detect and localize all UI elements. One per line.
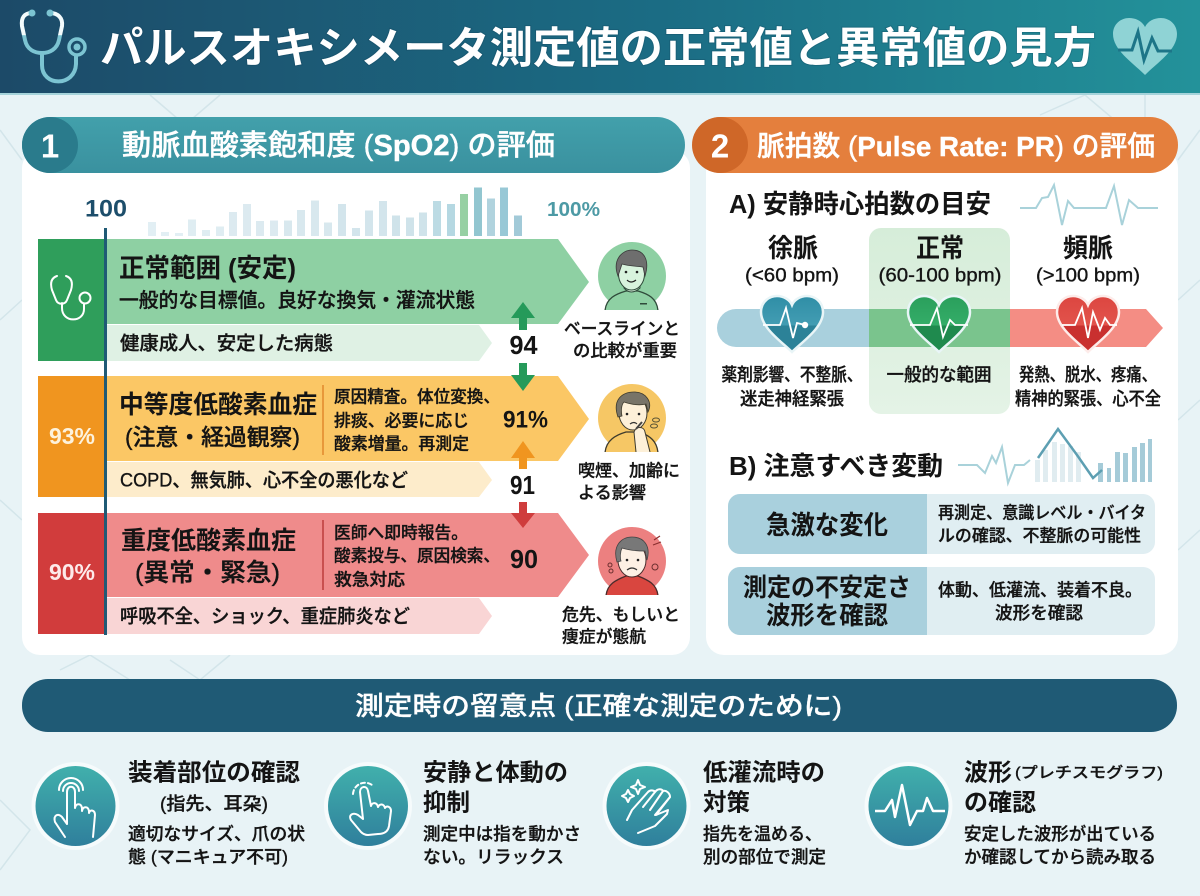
bradycardia: 迷走神経緊張 [740,389,844,409]
caption: baseline: の比較が重要 [573,340,677,360]
subheading A: A) 安静時心拍数の目安 [729,189,991,219]
tip 3: low perfusion: 低灌流時の [703,760,825,786]
panel: SpO2 evaluation [22,117,690,655]
bradycardia: 徐脈 [768,233,818,263]
moderate hypoxemia row: COPD、無気肺、心不全の悪化など [120,470,408,492]
icon: heart green [908,296,970,352]
normal range row [38,239,589,361]
icon: stethoscope small [51,276,90,319]
threshold 91 with arrows: 91 [510,470,535,500]
sudden change row: ルの確認、不整脈の可能性 [938,526,1141,546]
normal rate: (60-100 bpm) [878,266,1002,286]
caption: baseline: ベースラインと [564,320,680,338]
normal range highlight [869,228,1010,414]
icon: hand tap [324,762,412,850]
tip 4: waveform: (プレチスモグラフ) [1015,764,1163,782]
severe hypoxemia row: 90 [510,544,538,574]
moderate hypoxemia row: 91% [503,406,548,434]
avatar: worried smoker [598,384,666,453]
tip 3: low perfusion: 別の部位で測定 [703,847,826,867]
tip 1: attachment site: 態 (マニキュア不可) [128,847,288,867]
tip 4: waveform: 波形 [964,760,1012,786]
bradycardia: 薬剤影響、不整脈、 [722,365,862,385]
tip 4: waveform: の確認 [964,790,1036,816]
section: measurement notes header [22,679,1177,732]
sudden change row: 急激な変化 [766,510,888,540]
section 1 header: 動脈血酸素飽和度 (SpO2) の評価 [122,129,555,162]
panel: pulse rate evaluation [692,117,1178,655]
severe hypoxemia row: 医師へ即時報告。 [334,524,468,542]
mini bar chart [148,188,522,236]
section 1 header [22,117,685,173]
sudden change row [728,494,1155,554]
tip 2: rest: 測定中は指を動かさ [423,824,581,844]
section 2 header [692,117,1178,173]
section 2 header: 2 [711,128,729,164]
threshold 94 with arrows [510,302,538,391]
normal range row: 健康成人、安定した病態 [120,332,333,354]
moderate hypoxemia row: 排痰、必要に応じ [334,412,469,430]
normal range row: 正常範囲 (安定) [119,253,296,283]
severe hypoxemia row: (異常・緊急) [135,559,280,587]
tip 4: waveform: か確認してから読み取る [964,847,1156,867]
threshold 94 with arrows: 94 [510,330,538,360]
tip 3: low perfusion: 指先を温める、 [703,824,822,844]
subheading B: B) 注意すべき変動 [729,451,943,481]
tip 2: rest [324,760,581,867]
section 1 header: 1 [41,128,59,164]
scale label 100: 100 [85,196,127,222]
tip 3: low perfusion: 対策 [703,790,750,816]
tip 1: attachment site: (指先、耳朶) [160,794,268,814]
tachycardia [1015,233,1161,409]
caption: smoking and age: よる影響 [578,484,646,502]
normal rate: 一般的な範囲 [886,365,992,385]
moderate hypoxemia row: 原因精査。体位変換、 [334,388,500,406]
severe hypoxemia row [38,513,589,634]
caption: baseline [564,320,680,360]
tip 3: low perfusion [602,760,826,867]
tip 2: rest: 抑制 [423,790,470,816]
trend chart B [958,429,1152,483]
tip 1: attachment site [32,760,305,867]
ecg line A [1020,185,1158,225]
unstable measurement row: 波形を確認 [995,603,1084,623]
normal rate [878,233,1002,385]
icon: touch finger [32,762,120,850]
caption: smoking and age: 喫煙、加齢に [578,462,680,480]
unstable measurement row [728,567,1155,635]
tip 4: waveform [864,760,1163,867]
unstable measurement row: 波形を確認 [766,602,888,630]
tip 4: waveform: 安定した波形が出ている [964,824,1156,844]
vertical scale axis [104,228,107,635]
bradycardia [722,233,862,409]
scale label 100%: 100% [547,199,600,221]
moderate hypoxemia row: 酸素増量。再測定 [334,434,469,454]
range band [717,309,1163,347]
section: measurement notes header: 測定時の留意点 (正確な測定のために) [355,691,842,721]
caption: critical: 危先、もしいと [562,606,680,624]
icon: heart with pulse [1113,18,1177,75]
moderate hypoxemia row [38,376,589,497]
moderate hypoxemia row: 中等度低酸素血症 [119,391,317,419]
tip 1: attachment site: 装着部位の確認 [128,760,300,786]
unstable measurement row: 測定の不安定さ [743,574,911,602]
icon: heart blue [761,296,823,352]
tip 2: rest: 安静と体動の [423,760,568,786]
normal rate: 正常 [916,233,964,263]
icon: heart red [1057,296,1119,352]
tip 2: rest: ない。リラックス [423,847,564,867]
severe hypoxemia row: 呼吸不全、ショック、重症肺炎など [120,606,410,628]
severe hypoxemia row: 酸素投与、原因検索、 [334,546,500,566]
caption: critical [562,606,680,646]
section 2 header: 脈拍数 (Pulse Rate: PR) の評価 [757,130,1155,162]
unstable measurement row: 体動、低灌流、装着不良。 [938,580,1142,600]
tachycardia: (>100 bpm) [1036,266,1140,286]
severe hypoxemia row: 90% [49,559,95,585]
icon: waveform [864,762,952,850]
caption: smoking and age [578,462,680,502]
severe hypoxemia row: 重度低酸素血症 [121,527,296,555]
icon: warm hand [602,762,690,850]
severe hypoxemia row: 救急対応 [334,570,405,590]
normal range row: 一般的な目標値。良好な換気・灌流状態 [119,289,475,312]
tip 1: attachment site: 適切なサイズ、爪の状 [128,824,305,844]
bradycardia: (<60 bpm) [745,266,839,286]
moderate hypoxemia row: (注意・経過観察) [125,424,300,450]
sudden change row: 再測定、意識レベル・バイタ [938,504,1146,522]
avatar: distressed person [598,527,666,596]
tachycardia: 精神的緊張、心不全 [1015,389,1161,409]
moderate hypoxemia row: 93% [49,423,95,449]
header banner [0,0,1200,95]
title: パルスオキシメータ測定値の正常値と異常値の見方 [100,25,1096,73]
avatar: calm person [598,242,666,311]
threshold 91 with arrows [510,441,535,528]
tachycardia: 発熱、脱水、疼痛、 [1019,365,1157,385]
tachycardia: 頻脈 [1063,233,1113,263]
icon: stethoscope [22,10,85,81]
caption: critical: 痩症が態航 [562,626,646,646]
